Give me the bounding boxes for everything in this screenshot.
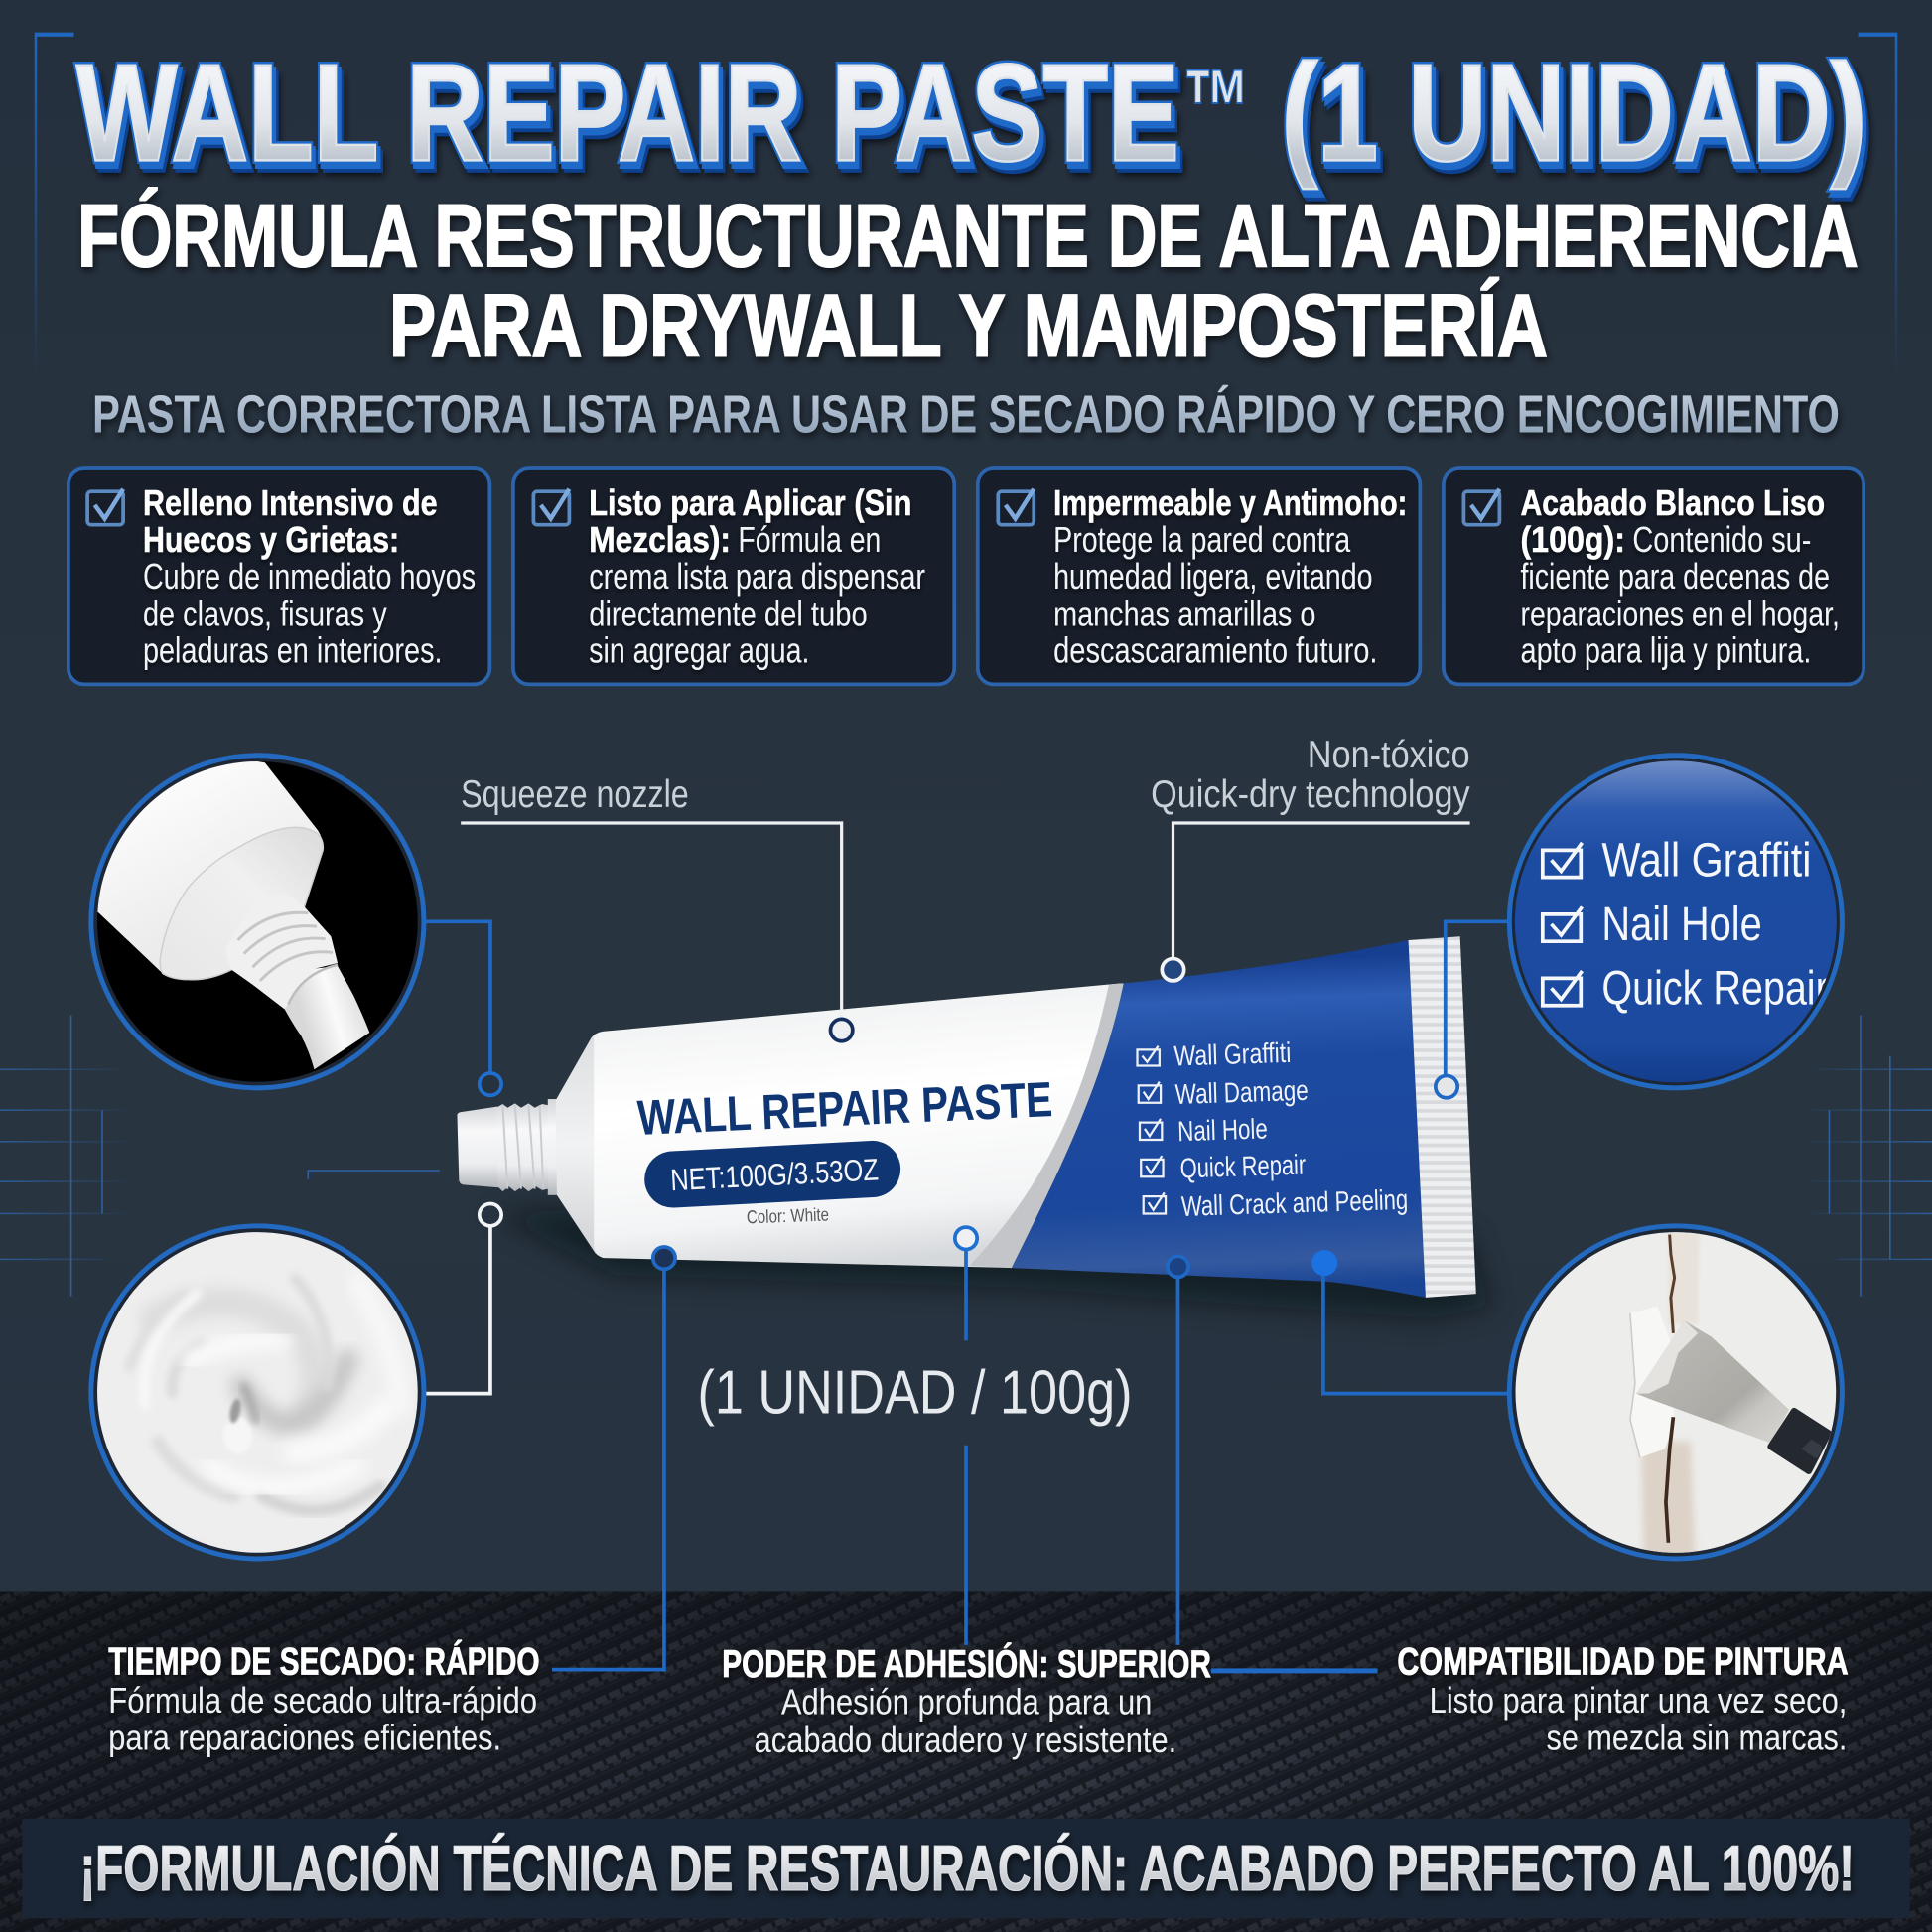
callout dots xyxy=(480,959,1457,1277)
circle: cream swirl xyxy=(86,1220,431,1578)
card text: Fórmula en xyxy=(738,519,881,560)
card text: Contenido su- xyxy=(1632,519,1811,560)
card text: sin agregar agua. xyxy=(589,630,809,671)
tube blue label xyxy=(1012,940,1426,1298)
circle: label closeup: Quick Repair xyxy=(1601,962,1829,1015)
tube grey band xyxy=(970,983,1124,1268)
card text: Protege la pared contra xyxy=(1053,519,1351,560)
tube white body xyxy=(594,983,1121,1268)
card: impermeable xyxy=(978,468,1420,684)
card text xyxy=(1520,483,1840,671)
product tube xyxy=(457,936,1476,1298)
card text: peladuras en interiores. xyxy=(143,630,443,671)
spatula blade xyxy=(1636,1320,1789,1443)
card text: Mezclas): xyxy=(589,519,731,560)
card text: (100g): xyxy=(1520,519,1625,560)
circle: label closeup xyxy=(1509,756,1842,1090)
card text: directamente del tubo xyxy=(589,593,868,633)
card text: Cubre de inmediato hoyos xyxy=(143,556,476,597)
feature: drying time: Fórmula de secado ultra-rápido xyxy=(108,1680,537,1721)
card text: apto para lija y pintura. xyxy=(1520,630,1811,671)
circle: wall repair with spatula xyxy=(1509,1226,1842,1559)
tube nozzle xyxy=(457,1099,558,1195)
title: WALL REPAIR PASTE xyxy=(76,36,1179,190)
callout lines xyxy=(425,823,1508,1671)
label: non-toxic quick dry: Non-tóxico xyxy=(1308,734,1470,776)
icon: checkbox xyxy=(533,489,569,525)
title: WALL REPAIR PASTE xyxy=(78,41,1181,195)
feature: drying time: para reparaciones eficientes. xyxy=(108,1717,501,1757)
card text: Relleno Intensivo de xyxy=(143,483,438,523)
brand name: WALL REPAIR PASTE xyxy=(636,1071,1053,1146)
card text: ficiente para decenas de xyxy=(1520,556,1830,597)
left blueprint grid xyxy=(0,1016,440,1297)
card text: descascaramiento futuro. xyxy=(1053,630,1378,671)
card text xyxy=(1053,483,1407,671)
net weight pill xyxy=(643,1139,902,1209)
icon: checkbox xyxy=(998,489,1034,525)
feature: paint compatibility: se mezcla sin marcas. xyxy=(1547,1717,1847,1757)
bottom banner xyxy=(22,1819,1910,1918)
card text: crema lista para dispensar xyxy=(589,556,925,597)
feature: adhesion xyxy=(722,1642,1211,1760)
card text: manchas amarillas o xyxy=(1053,593,1315,633)
card text xyxy=(143,483,476,671)
tube body zoom xyxy=(97,761,322,973)
blue label checklist: Quick Repair xyxy=(1179,1149,1307,1184)
card: relleno xyxy=(69,468,489,684)
title: WALL REPAIR PASTE xyxy=(81,45,1184,199)
blue label checklist: Wall Graffiti xyxy=(1173,1037,1292,1073)
hose xyxy=(285,966,369,1069)
title: ™ xyxy=(1182,47,1251,166)
card text: Huecos y Grietas: xyxy=(143,519,399,560)
circle: label closeup: Nail Hole xyxy=(1601,898,1762,951)
tube shoulder xyxy=(556,1032,604,1258)
feature: drying time xyxy=(108,1640,540,1757)
label: non-toxic quick dry xyxy=(1151,734,1470,816)
corner bracket right xyxy=(1859,35,1897,382)
tube shadow xyxy=(492,1207,1491,1318)
spatula handle xyxy=(1770,1411,1829,1471)
card text: Impermeable y Antimoho: xyxy=(1053,483,1407,523)
icon: checkbox xyxy=(87,489,123,525)
label: unit size: (1 UNIDAD / 100g) xyxy=(697,1359,1133,1428)
subtitle xyxy=(77,186,1859,375)
blue label checklist xyxy=(1138,1037,1409,1223)
circle: nozzle detail xyxy=(73,752,431,1097)
title: WALL REPAIR PASTE xyxy=(76,36,1179,190)
net weight pill: NET:100G/3.53OZ xyxy=(669,1152,880,1197)
feature: paint compatibility: Listo para pintar una vez seco, xyxy=(1430,1680,1847,1721)
feature: drying time: TIEMPO DE SECADO: RÁPIDO xyxy=(108,1640,540,1684)
card text xyxy=(589,483,925,671)
circle: label closeup: Wall Graffiti xyxy=(1601,834,1811,887)
feature: adhesion: PODER DE ADHESIÓN: SUPERIOR xyxy=(722,1642,1211,1686)
shoulder disc xyxy=(160,827,323,980)
label: squeeze nozzle: Squeeze nozzle xyxy=(461,773,689,816)
color note: Color: White xyxy=(746,1203,829,1227)
feature: paint compatibility xyxy=(1397,1641,1849,1757)
corner bracket left xyxy=(35,35,73,382)
tube crimp xyxy=(1409,936,1476,1298)
blue label checklist: Nail Hole xyxy=(1177,1113,1268,1148)
card text: Listo para Aplicar (Sin xyxy=(589,483,911,523)
threads xyxy=(231,906,338,1009)
card: listo para aplicar xyxy=(513,468,954,684)
feature: adhesion: acabado duradero y resistente. xyxy=(755,1720,1176,1760)
card text: Acabado Blanco Liso xyxy=(1520,483,1825,523)
label: non-toxic quick dry: Quick-dry technology xyxy=(1151,773,1470,816)
carbon fibre footer background xyxy=(0,1591,1932,1932)
card: acabado xyxy=(1444,468,1863,684)
blue label checklist: Wall Damage xyxy=(1174,1075,1309,1111)
card text: humedad ligera, evitando xyxy=(1053,556,1373,597)
subtitle: PARA DRYWALL Y MAMPOSTERÍA xyxy=(389,276,1548,375)
blue label checklist: Wall Crack and Peeling xyxy=(1180,1184,1409,1223)
right blueprint grid xyxy=(1799,1016,1932,1297)
feature: adhesion: Adhesión profunda para un xyxy=(781,1681,1152,1722)
icon: checkbox xyxy=(1463,489,1499,525)
card text: reparaciones en el hogar, xyxy=(1520,593,1840,633)
card text: de clavos, fisuras y xyxy=(143,593,387,633)
